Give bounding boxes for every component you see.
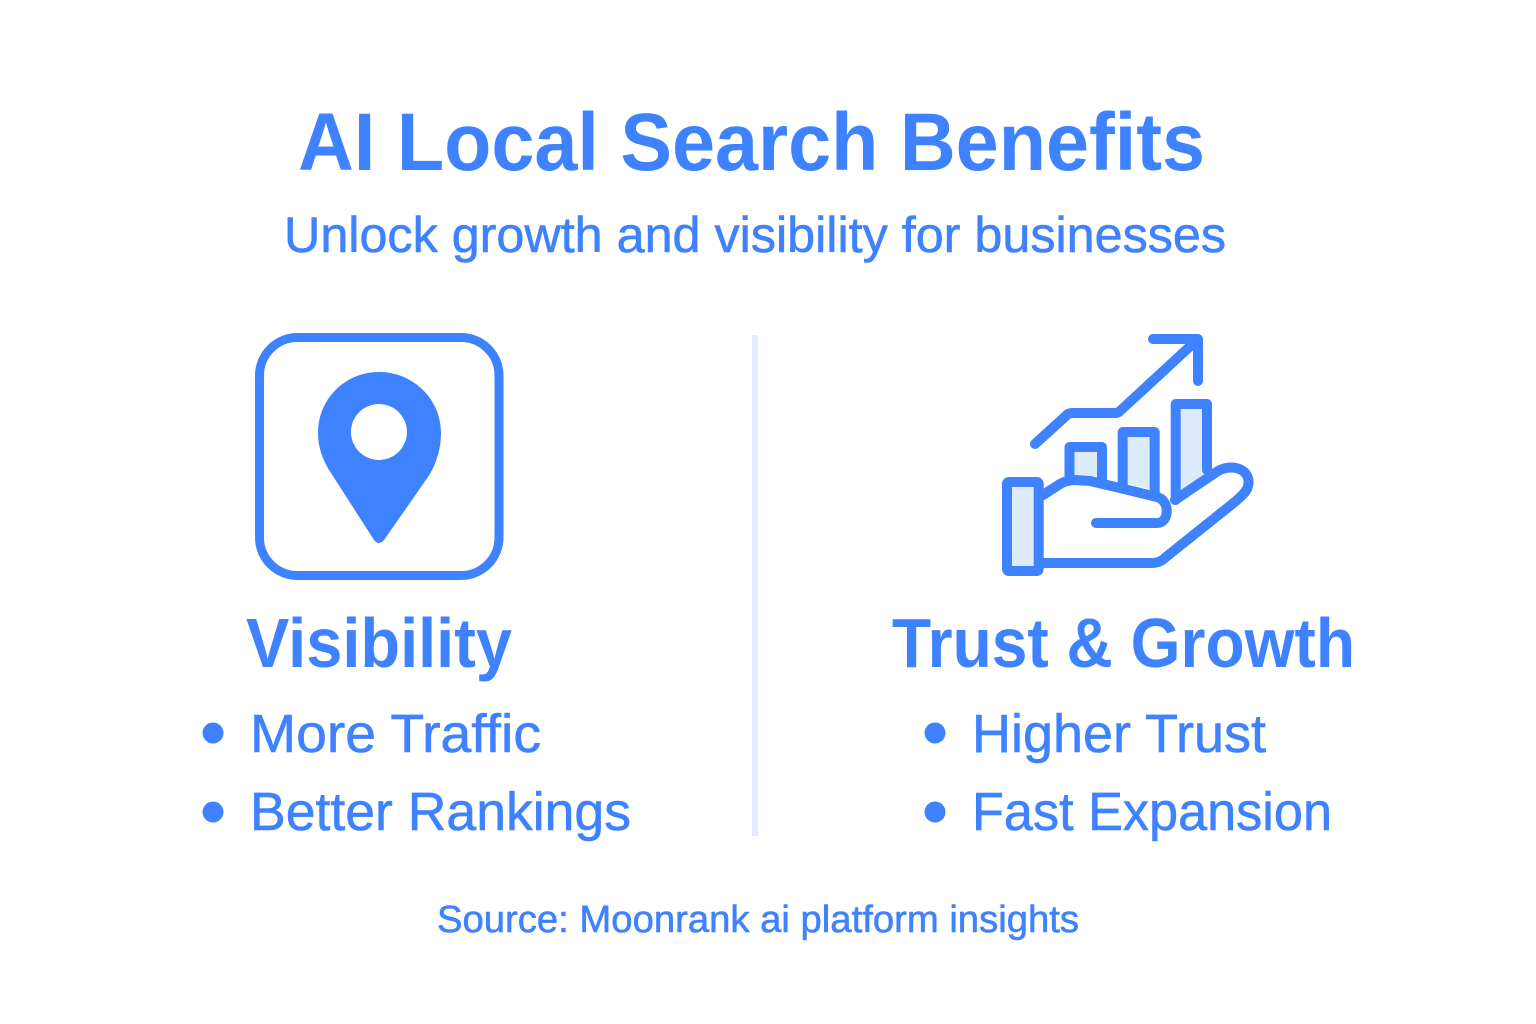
hand	[1043, 480, 1167, 523]
bullet	[924, 722, 946, 744]
heading: trust and growth: Trust & Growth	[892, 604, 1355, 682]
bullet	[202, 802, 224, 822]
icon: hand holding growth chart	[1007, 339, 1249, 571]
bullet	[202, 722, 224, 744]
trend arrow	[1035, 340, 1197, 444]
list: visibility benefits	[202, 704, 631, 842]
heading: visibility: Visibility	[246, 604, 512, 682]
title: AI Local Search Benefits	[298, 97, 1205, 188]
bullet	[924, 802, 946, 822]
icon: map pin in rounded square	[260, 338, 499, 576]
bar fills	[1011, 408, 1203, 567]
bars	[1070, 447, 1102, 480]
subtitle: Unlock growth and visibility for businesses	[284, 207, 1226, 263]
list item: Higher Trust	[972, 704, 1266, 764]
panel: visibility	[202, 338, 631, 842]
list: trust benefits	[924, 704, 1332, 842]
panel: trust and growth	[892, 339, 1355, 842]
list item: More Traffic	[250, 704, 541, 764]
list item: Better Rankings	[250, 782, 631, 842]
source note: Source: Moonrank ai platform insights	[437, 899, 1079, 941]
panel divider	[752, 335, 758, 836]
list item: Fast Expansion	[972, 782, 1332, 842]
sleeve cuff	[1007, 482, 1039, 571]
